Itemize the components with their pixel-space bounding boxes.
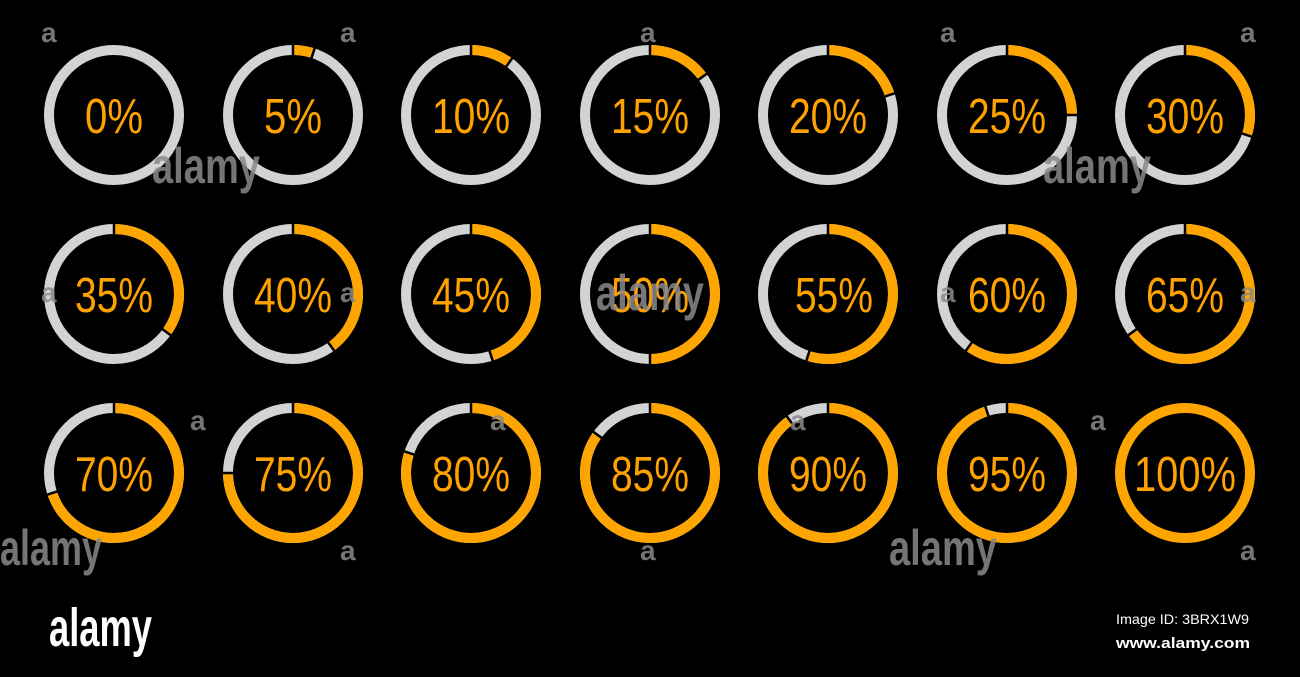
watermarks: a xyxy=(190,405,206,436)
gauge: 25% xyxy=(942,44,1078,180)
watermarks: a xyxy=(340,17,356,48)
gauge: 25%: 25% xyxy=(968,90,1046,144)
watermarks: alamy xyxy=(1043,138,1151,194)
watermarks: alamy xyxy=(152,138,260,194)
watermarks: a xyxy=(1240,277,1256,308)
gauge: 50% xyxy=(585,223,715,365)
gauge: 30%: 30% xyxy=(1146,90,1224,144)
gauge: 5%: 5% xyxy=(264,90,322,144)
gauge: 45% xyxy=(406,223,536,362)
gauge: 55% xyxy=(763,223,893,362)
gauge: 65% xyxy=(1120,223,1250,359)
gauge: 10%: 10% xyxy=(432,90,510,144)
watermarks: a xyxy=(940,17,956,48)
gauge: 15%: 15% xyxy=(611,90,689,144)
gauge: 80%: 80% xyxy=(432,448,510,502)
gauge: 65%: 65% xyxy=(1146,269,1224,323)
watermarks: a xyxy=(41,17,57,48)
gauge: 5% xyxy=(228,44,358,180)
gauge: 0% xyxy=(49,50,179,180)
watermarks: a xyxy=(1240,535,1256,566)
watermarks: a xyxy=(490,405,506,436)
gauge: 55%: 55% xyxy=(795,269,873,323)
gauge: 75%: 75% xyxy=(254,448,332,502)
gauge: 70% xyxy=(46,402,179,538)
watermarks: a xyxy=(41,277,57,308)
gauge: 35% xyxy=(49,223,179,359)
gauge: 35%: 35% xyxy=(75,269,153,323)
gauge: 20%: 20% xyxy=(789,90,867,144)
logo: alamy: alamy xyxy=(49,598,152,658)
gauge: 70%: 70% xyxy=(75,448,153,502)
watermarks: a xyxy=(940,277,956,308)
watermarks: a xyxy=(340,535,356,566)
watermarks: alamy xyxy=(889,520,997,576)
gauge: 85%: 85% xyxy=(611,448,689,502)
gauge: 50%: 50% xyxy=(611,269,689,323)
website text: www.alamy.com xyxy=(1115,635,1250,652)
gauge: 80% xyxy=(403,402,536,538)
watermarks: a xyxy=(640,535,656,566)
watermarks: a xyxy=(1090,405,1106,436)
watermarks: a xyxy=(640,17,656,48)
gauge: 60%: 60% xyxy=(968,269,1046,323)
gauge: 85% xyxy=(585,402,715,538)
gauge: 10% xyxy=(406,44,536,180)
watermarks: a xyxy=(790,405,806,436)
watermarks xyxy=(0,17,1256,576)
gauge: 90% xyxy=(763,402,893,538)
gauge: 0%: 0% xyxy=(85,90,143,144)
gauge: 75% xyxy=(222,402,358,538)
gauge: 100%: 100% xyxy=(1134,448,1236,502)
gauge: 20% xyxy=(763,44,896,180)
watermarks: alamy xyxy=(0,520,102,576)
gauge: 15% xyxy=(585,44,715,180)
gauge: 100% xyxy=(1120,408,1250,538)
watermarks: a xyxy=(340,277,356,308)
gauge: 95%: 95% xyxy=(968,448,1046,502)
gauge: 30% xyxy=(1120,44,1253,180)
gauge: 40%: 40% xyxy=(254,269,332,323)
gauge: 95% xyxy=(942,402,1072,538)
gauge: 40% xyxy=(228,223,358,359)
watermarks: alamy xyxy=(596,265,704,321)
gauge: 45%: 45% xyxy=(432,269,510,323)
watermarks: a xyxy=(1240,17,1256,48)
image id text: Image ID: 3BRX1W9 xyxy=(1116,611,1249,627)
gauge: 90%: 90% xyxy=(789,448,867,502)
gauge: 60% xyxy=(942,223,1072,359)
